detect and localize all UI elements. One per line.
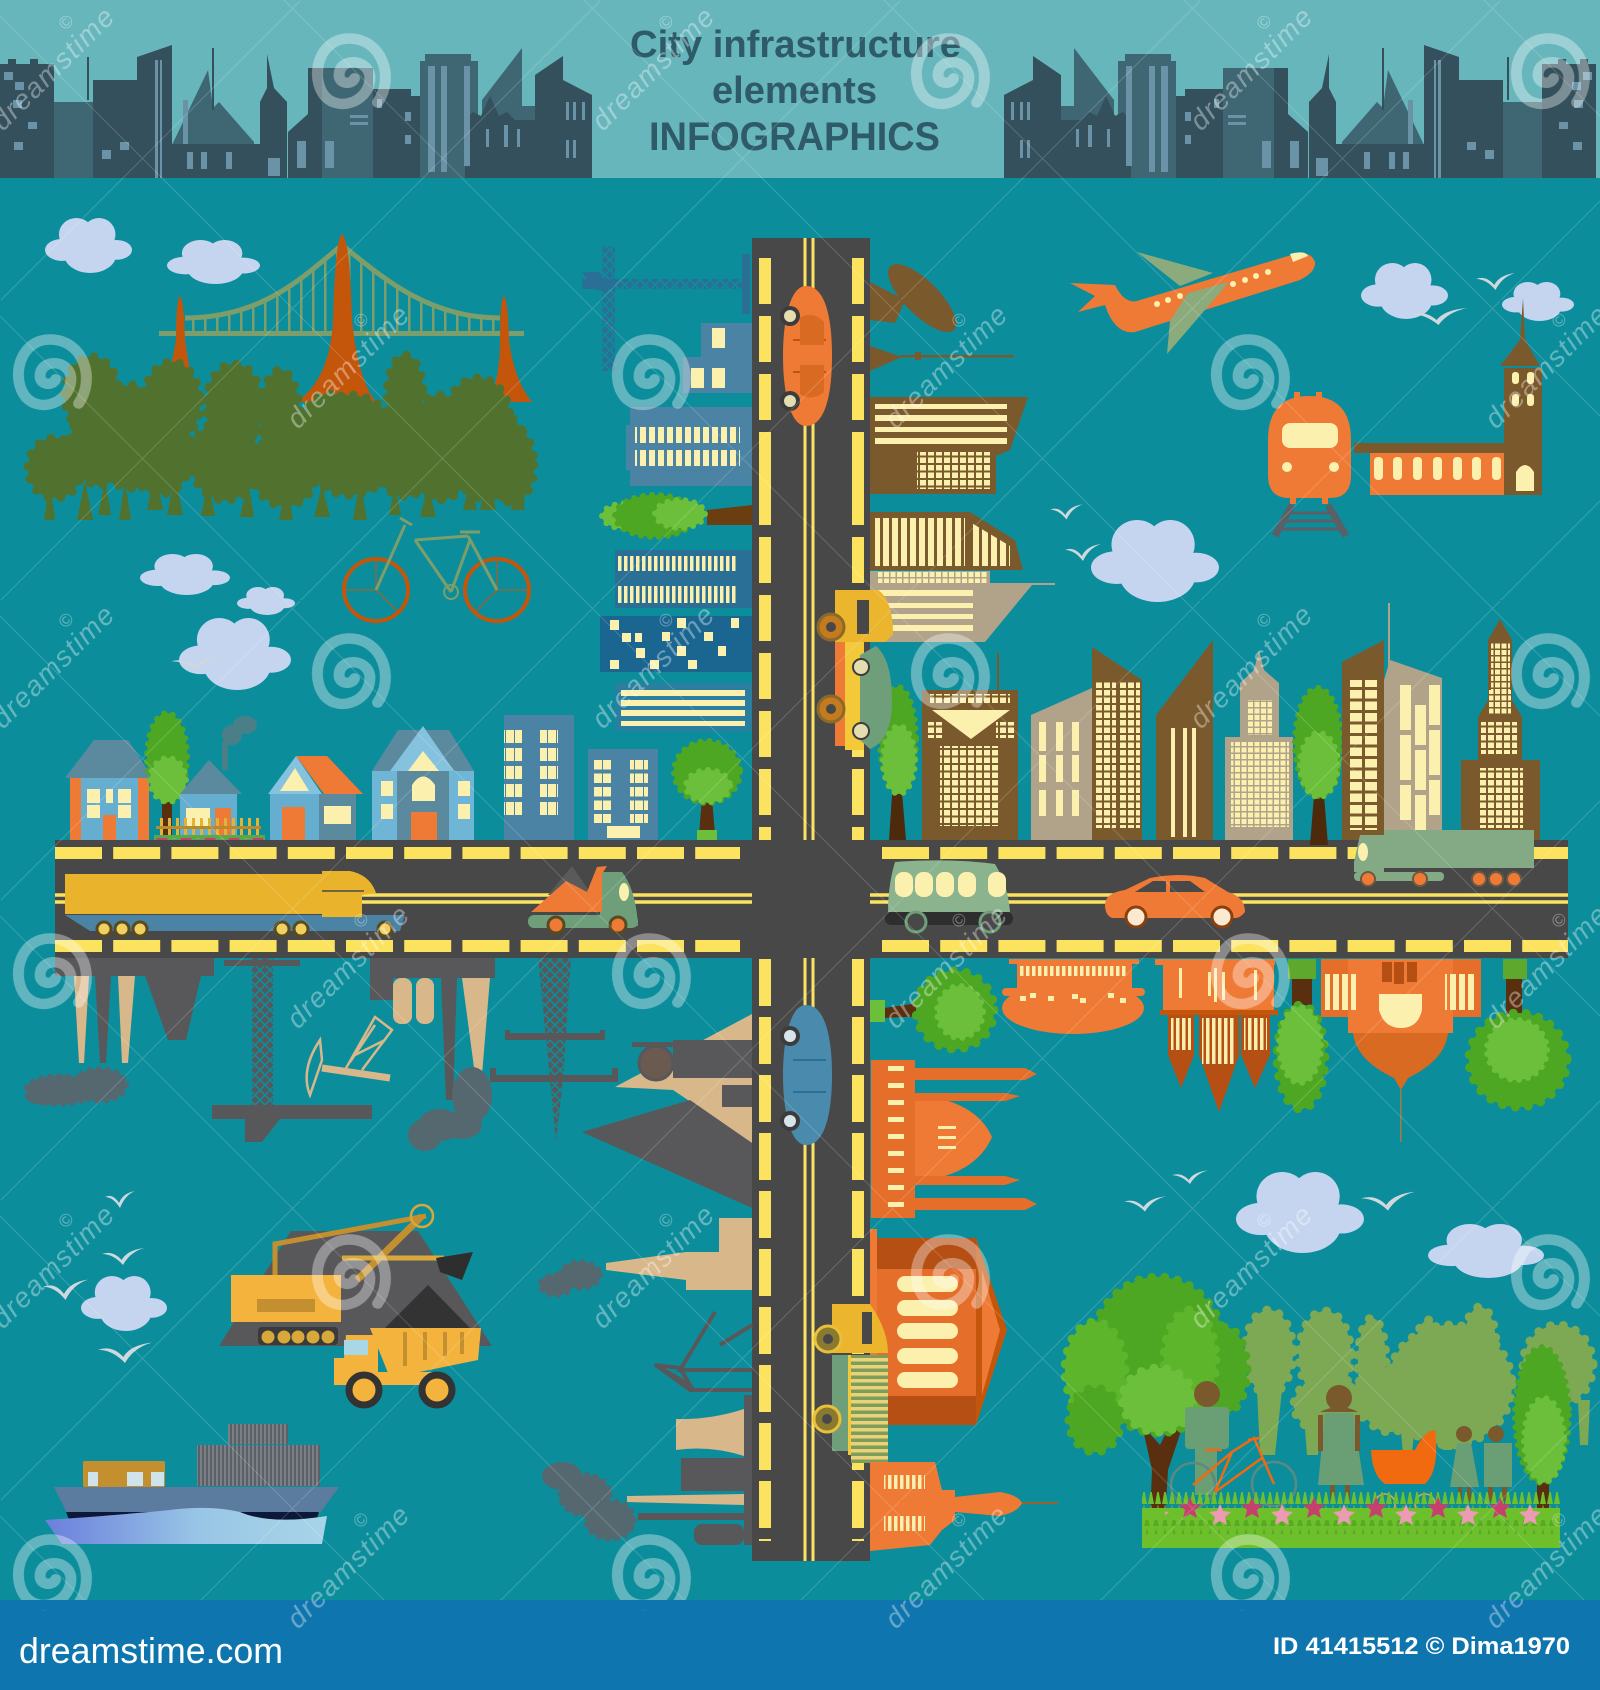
dark blue striped building: [615, 550, 752, 608]
watermark text: ©: [1252, 608, 1277, 632]
cargo ship: [45, 1424, 339, 1544]
watermark text: ©: [1252, 1208, 1277, 1232]
sideways orange tower: [870, 1462, 1058, 1551]
watermark text: dreamstime: [1183, 1198, 1319, 1334]
watermark text: dreamstime: [585, 1198, 721, 1334]
watermark text: ©: [947, 1508, 972, 1532]
brown office building: [870, 397, 1028, 494]
orange museum: [870, 1229, 1007, 1425]
orange car on vertical road: [780, 286, 832, 426]
tan tower: [1031, 688, 1092, 840]
fence with flowers: [154, 818, 265, 846]
factory with chimneys: [55, 958, 214, 1063]
gray drilling rig: [655, 1312, 752, 1390]
power plant smoke: [408, 1067, 492, 1151]
small house with smoke: [180, 716, 257, 840]
blue house with gable: [372, 726, 474, 840]
footer band: [0, 1600, 1600, 1690]
orange bicycle: [1171, 1438, 1296, 1507]
upside down tree one: [1277, 959, 1325, 1109]
park with family: [1065, 1277, 1593, 1548]
upside down cathedral: [1155, 959, 1278, 1112]
stepped blue building: [683, 323, 752, 393]
house with orange sides: [65, 740, 153, 840]
man: [1185, 1381, 1229, 1495]
woman: [1318, 1385, 1364, 1500]
apartment block small: [588, 749, 658, 840]
girl: [1450, 1426, 1479, 1501]
blue building with random windows: [600, 616, 752, 672]
train: [1268, 392, 1351, 536]
orange bowl building: [1002, 959, 1145, 1034]
watermark text: ©: [349, 908, 374, 932]
coal conveyor with wheel: [582, 1014, 752, 1208]
apartment block: [504, 715, 574, 840]
title: elements: [712, 70, 877, 112]
upside down domed palace: [1321, 959, 1481, 1142]
mining dump truck: [334, 1285, 481, 1405]
blue office with windows: [626, 407, 752, 486]
twin towers: [1342, 603, 1442, 840]
tree between buildings: [880, 687, 916, 840]
green tree by house: [147, 713, 187, 840]
tan building: [870, 571, 1055, 642]
dump truck on road: [528, 866, 638, 933]
power pylon: [490, 958, 618, 1142]
title: [630, 24, 961, 159]
watermark text: ©: [947, 308, 972, 332]
airplane: [1070, 252, 1315, 354]
tree between towers: [1295, 688, 1341, 845]
excavator: [219, 1205, 492, 1346]
bicycle: [344, 518, 529, 621]
power plant with tanks: [370, 958, 495, 1100]
lattice crane tower: [212, 958, 372, 1142]
forest of dark trees: [28, 355, 534, 520]
watermark text: dreamstime: [878, 1498, 1014, 1634]
title: City infrastructure: [630, 24, 961, 66]
grass and flowers: [1142, 1492, 1560, 1548]
birds: [43, 273, 1515, 1363]
sideways green tree: [602, 495, 752, 537]
watermark text: ©: [54, 608, 79, 632]
watermark text: ©: [54, 1208, 79, 1232]
tan stepped tower: [1225, 650, 1293, 840]
sky header band: [0, 0, 1600, 178]
watermark text: dreamstime: [585, 598, 721, 734]
clouds: [45, 218, 1574, 1331]
watermark text: dreamstime: [1183, 0, 1319, 136]
smoke by cooling tower: [542, 1462, 634, 1539]
watermark text: dreamstime: [878, 898, 1014, 1034]
construction crane: [582, 246, 750, 371]
watermark text: ©: [654, 1208, 679, 1232]
watermark text: ©: [947, 908, 972, 932]
footer brand: dreamstime.com: [19, 1630, 283, 1671]
brown striped building: [870, 512, 1023, 570]
house with orange roof: [268, 756, 363, 840]
blue car: [780, 1005, 832, 1145]
watermark text: ©: [1547, 308, 1572, 332]
orange stroller: [1371, 1430, 1436, 1514]
background light trees: [1245, 1307, 1593, 1455]
sideways green tree lower: [870, 971, 994, 1049]
watermark text: dreamstime: [280, 898, 416, 1034]
factory smoke: [25, 1069, 126, 1105]
cooling tower plant: [627, 1395, 752, 1545]
watermark text: dreamstime: [280, 1498, 416, 1634]
smoke above tan factory: [540, 1262, 600, 1295]
watermark text: ©: [654, 10, 679, 34]
yellow tanker truck: [65, 871, 405, 936]
road network: [55, 238, 1568, 1561]
brown sail tower: [1156, 640, 1213, 840]
boy: [1484, 1426, 1512, 1501]
watermark text: dreamstime: [585, 0, 721, 136]
stepped skyscraper: [1461, 619, 1540, 840]
oil pump: [307, 1017, 392, 1095]
watermark text: ©: [54, 10, 79, 34]
radio antenna: [870, 346, 1014, 371]
brown slanted tower: [1092, 647, 1142, 840]
orange sedan: [1105, 875, 1245, 927]
watermark text: ©: [1547, 908, 1572, 932]
satellite dish: [870, 254, 966, 342]
watermark text: ©: [349, 308, 374, 332]
truck with striped load: [814, 1304, 888, 1463]
right header skyline: [1004, 45, 1596, 178]
watermark text: dreamstime: [1183, 598, 1319, 734]
title: INFOGRAPHICS: [649, 115, 940, 159]
green bus: [885, 860, 1013, 932]
watermark text: dreamstime: [280, 298, 416, 434]
footer cover for spirals: [0, 1600, 1600, 1610]
truck on vertical road with green car: [818, 590, 893, 750]
sideways mosque: [871, 1060, 1037, 1218]
suspension bridge: [159, 234, 532, 402]
green semi truck: [1354, 830, 1534, 886]
brown tower with triangle: [922, 653, 1018, 840]
blue striped building: [615, 683, 752, 731]
tree by road: [674, 741, 740, 840]
footer image id: ID 41415512 © Dima1970: [1273, 1633, 1570, 1660]
tan factory: [606, 1218, 752, 1290]
watermark text: dreamstime: [878, 298, 1014, 434]
left header skyline: [0, 45, 592, 178]
right green tree: [1515, 1347, 1569, 1530]
watermark text: ©: [1252, 10, 1277, 34]
watermark text: ©: [654, 608, 679, 632]
watermark text: ©: [349, 1508, 374, 1532]
train station with clock tower: [1354, 298, 1542, 495]
upside down tree two: [1469, 959, 1567, 1107]
large green tree: [1065, 1277, 1247, 1520]
watermark text: ©: [1547, 1508, 1572, 1532]
